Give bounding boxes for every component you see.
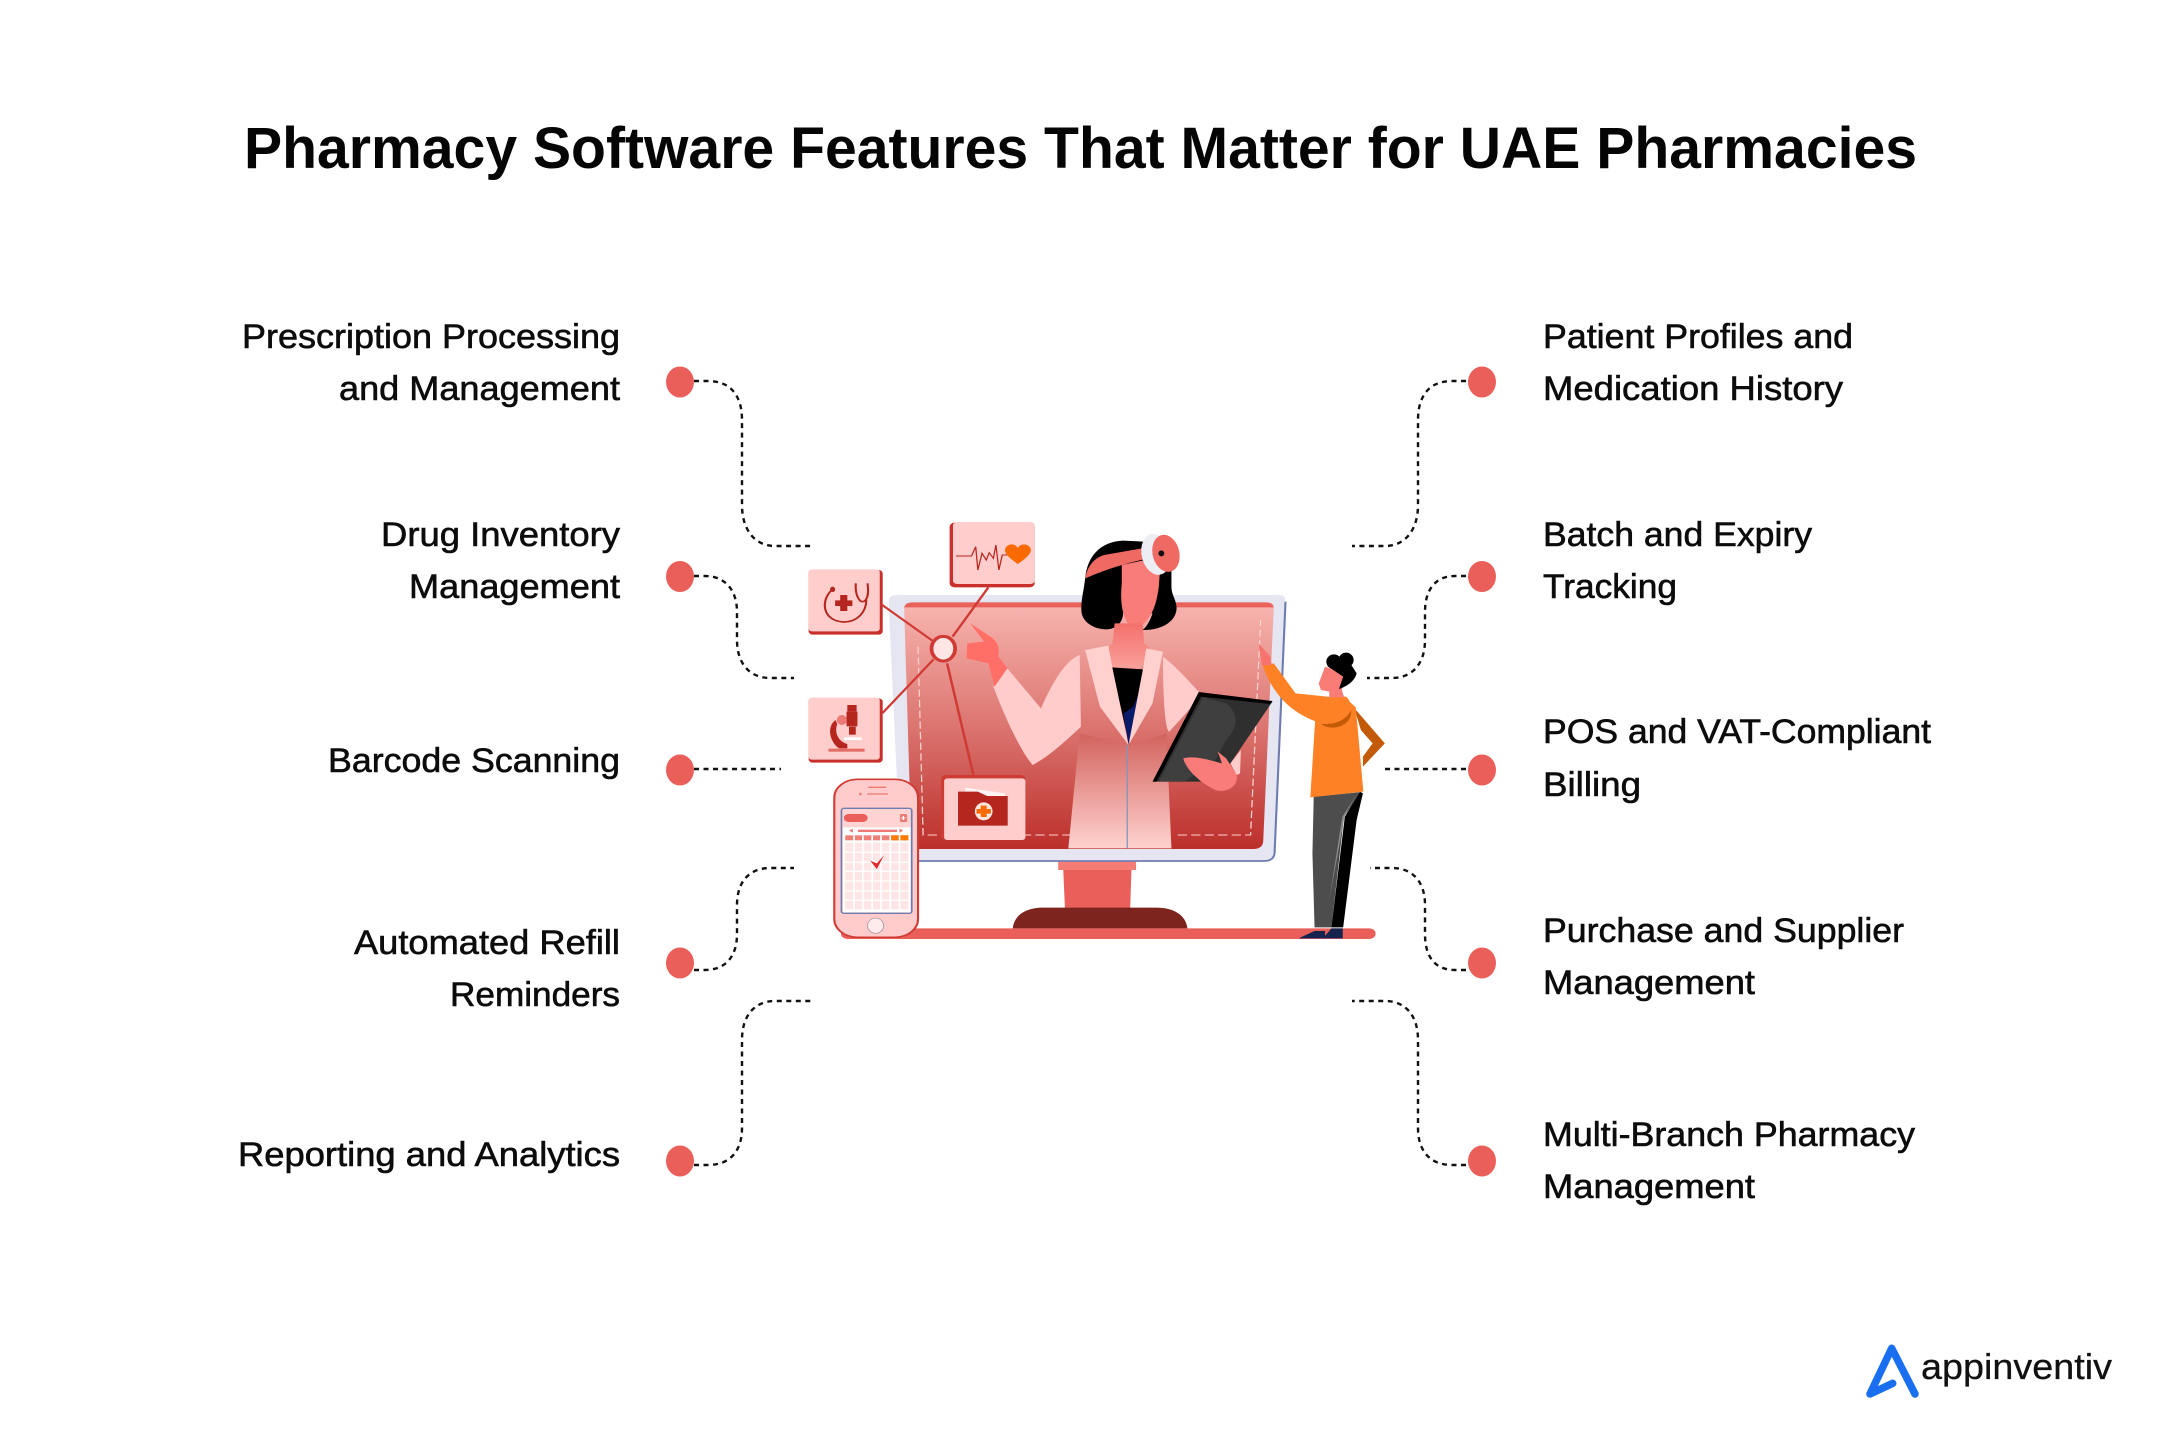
- label: POS and VAT-Compliant Billing: POS and VAT-Compliant: [1543, 713, 1932, 751]
- label: Patient Profiles and Medication History: Patient Profiles and: [1543, 318, 1853, 356]
- label: Automated Refill Reminders: [354, 924, 620, 1014]
- label: Batch and Expiry Tracking: Tracking: [1543, 568, 1677, 606]
- doctor: [966, 532, 1272, 848]
- label: Purchase and Supplier Management: Purchase and Supplier: [1543, 912, 1904, 950]
- right marker dots: [1468, 366, 1496, 1176]
- icon: medical folder card: [941, 775, 1025, 840]
- icon: stethoscope card: [809, 569, 883, 635]
- left feature labels: [238, 318, 621, 1174]
- label: Purchase and Supplier Management: Management: [1543, 964, 1756, 1002]
- label: Multi-Branch Pharmacy Management: Management: [1543, 1168, 1756, 1206]
- label: Patient Profiles and Medication History: [1543, 318, 1853, 408]
- label: POS and VAT-Compliant Billing: [1543, 713, 1932, 804]
- label: Multi-Branch Pharmacy Management: [1543, 1116, 1915, 1206]
- icon: logo triangle: [1870, 1348, 1915, 1394]
- logo: appinventiv: [1870, 1346, 2112, 1394]
- label: Automated Refill Reminders: Reminders: [450, 976, 620, 1014]
- network hub: [932, 636, 955, 661]
- phone with calendar: [834, 779, 918, 937]
- icon: microscope card: [809, 698, 883, 763]
- label: POS and VAT-Compliant Billing: Billing: [1543, 766, 1641, 804]
- base bar: [841, 928, 1376, 939]
- label: Batch and Expiry Tracking: Batch and Expiry: [1543, 516, 1812, 554]
- network lines: [882, 587, 988, 776]
- monitor: [889, 595, 1286, 861]
- left dotted connectors: [694, 381, 811, 1165]
- logo: appinventiv: appinventiv: [1921, 1346, 2112, 1387]
- label: Barcode Scanning: Barcode Scanning: [328, 742, 620, 780]
- person in orange sweater: [1259, 643, 1385, 938]
- label: Multi-Branch Pharmacy Management: Multi-Branch Pharmacy: [1543, 1116, 1915, 1154]
- label: Drug Inventory Management: Management: [409, 568, 621, 606]
- label: Patient Profiles and Medication History: Medication History: [1543, 370, 1843, 408]
- label: Batch and Expiry Tracking: [1543, 516, 1812, 606]
- label: Reporting and Analytics: Reporting and Analytics: [238, 1136, 620, 1174]
- left marker dots: [666, 366, 694, 1176]
- title: Pharmacy Software Features That Matter for UAE Pharmacies: [244, 116, 1917, 181]
- head mirror: [1138, 532, 1183, 576]
- central illustration: [809, 522, 1385, 939]
- right feature labels: [1543, 318, 1932, 1206]
- label: Automated Refill Reminders: Automated Refill: [354, 924, 620, 962]
- label: Drug Inventory Management: Drug Inventory: [381, 516, 620, 554]
- label: Drug Inventory Management: [381, 516, 621, 606]
- label: Purchase and Supplier Management: [1543, 912, 1904, 1002]
- label: Prescription Processing and Management: and Management: [339, 370, 621, 408]
- label: Prescription Processing and Management: Prescription Processing: [242, 318, 620, 356]
- right dotted connectors: [1352, 381, 1466, 1165]
- label: Prescription Processing and Management: [242, 318, 621, 408]
- icon: heart rate card: [950, 522, 1035, 587]
- monitor stand: [1013, 862, 1187, 928]
